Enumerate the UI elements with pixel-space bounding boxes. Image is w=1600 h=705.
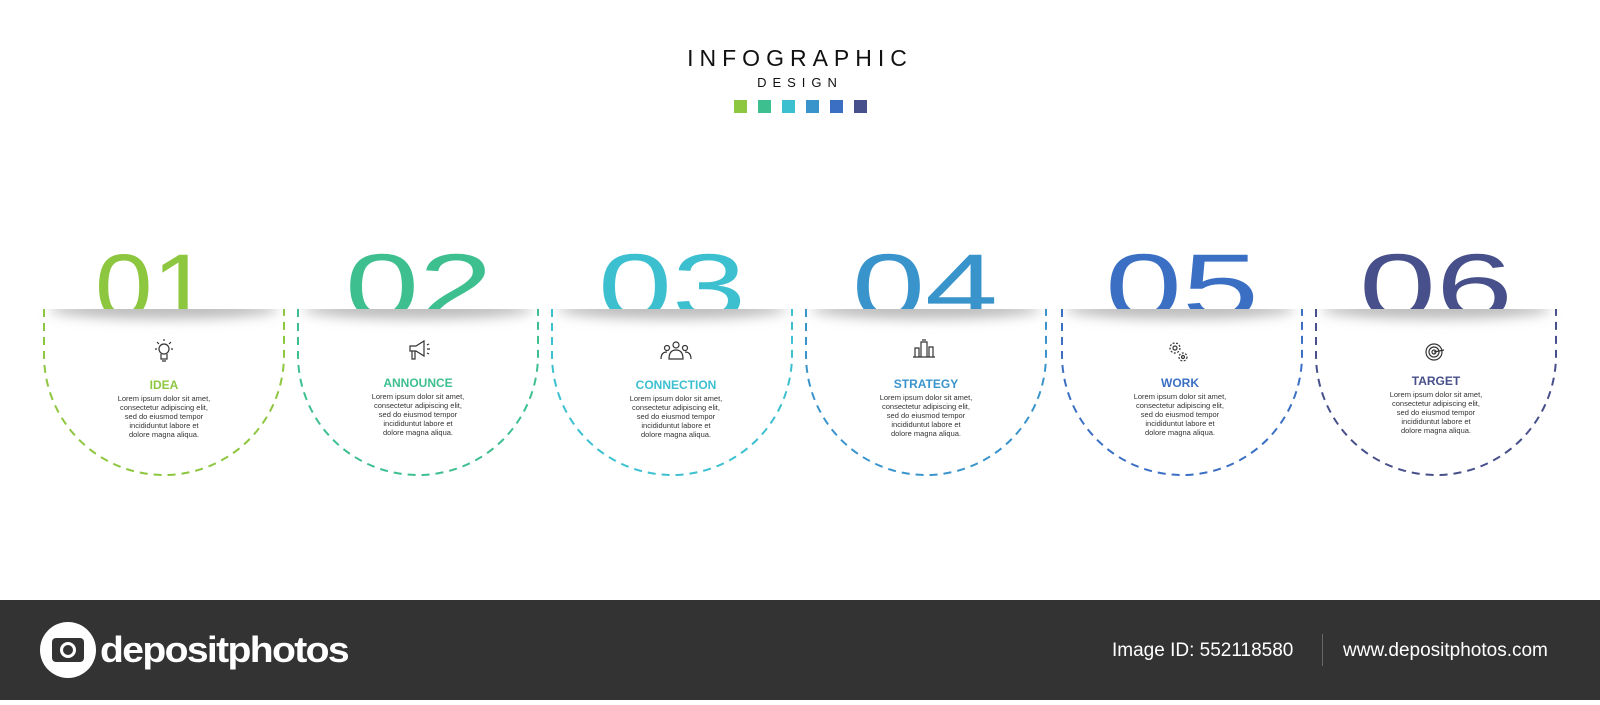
text block: dolore magna aliqua. (1401, 426, 1471, 435)
text block: dolore magna aliqua. (1145, 428, 1215, 437)
text block: consectetur adipiscing elit, (1136, 401, 1224, 410)
text block: Lorem ipsum dolor sit amet, (880, 393, 972, 402)
text block: dolore magna aliqua. (891, 429, 961, 438)
panel: 04 strategy (806, 236, 1046, 475)
text block: consectetur adipiscing elit, (882, 402, 970, 411)
panel: 03 connection (552, 236, 792, 475)
text block: incididuntut labore et (129, 421, 200, 430)
panel: 01 idea (44, 236, 284, 475)
text block: sed do eiusmod tempor (379, 410, 458, 419)
color legend squares (734, 100, 867, 113)
panel: 02 announce: ANNOUNCE (383, 376, 453, 390)
icon: gears (1170, 343, 1187, 361)
text block: dolore magna aliqua. (129, 430, 199, 439)
panel: 02 announce (298, 236, 538, 475)
text block: consectetur adipiscing elit, (120, 403, 208, 412)
number 02: 02 (345, 236, 493, 338)
text block: incididuntut labore et (1145, 419, 1216, 428)
number 06: 06 (1359, 236, 1513, 338)
icon: megaphone (410, 341, 430, 359)
text block: incididuntut labore et (383, 419, 454, 428)
text block: Lorem ipsum dolor sit amet, (118, 394, 210, 403)
text block: sed do eiusmod tempor (125, 412, 204, 421)
text block: incididuntut labore et (891, 420, 962, 429)
title: DESIGN (757, 75, 843, 90)
logo icon (40, 622, 96, 678)
text block: Lorem ipsum dolor sit amet, (1390, 390, 1482, 399)
icon: chess pieces (913, 340, 935, 357)
title: INFOGRAPHIC (687, 45, 913, 71)
text block: sed do eiusmod tempor (1397, 408, 1476, 417)
image id: Image ID: 552118580 (1112, 640, 1293, 661)
text block: sed do eiusmod tempor (637, 412, 716, 421)
text block: Lorem ipsum dolor sit amet, (372, 392, 464, 401)
text block: dolore magna aliqua. (641, 430, 711, 439)
text block: sed do eiusmod tempor (887, 411, 966, 420)
icon: target (1426, 344, 1444, 360)
panel: 06 target (1316, 236, 1556, 475)
icon: lightbulb (155, 339, 173, 361)
number 05: 05 (1105, 236, 1259, 338)
panel: 05 work (1062, 236, 1302, 475)
text block: consectetur adipiscing elit, (1392, 399, 1480, 408)
text block: dolore magna aliqua. (383, 428, 453, 437)
number 04: 04 (852, 236, 998, 338)
footer bar (0, 600, 1600, 700)
number 01: 01 (95, 236, 210, 338)
text block: sed do eiusmod tempor (1141, 410, 1220, 419)
icon: people (661, 342, 691, 359)
number 03: 03 (598, 236, 746, 338)
text block: Lorem ipsum dolor sit amet, (630, 394, 722, 403)
text block: consectetur adipiscing elit, (632, 403, 720, 412)
text block: incididuntut labore et (1401, 417, 1472, 426)
url: www.depositphotos.com (1342, 640, 1548, 661)
text block: consectetur adipiscing elit, (374, 401, 462, 410)
text block: incididuntut labore et (641, 421, 712, 430)
panel: 06 target: TARGET (1412, 374, 1461, 388)
panel: 04 strategy: STRATEGY (894, 377, 958, 391)
panel: 01 idea: IDEA (150, 378, 179, 392)
text block: Lorem ipsum dolor sit amet, (1134, 392, 1226, 401)
panel: 03 connection: CONNECTION (636, 378, 716, 392)
logo text: depositphotos (100, 629, 349, 670)
title (687, 45, 913, 90)
panel: 05 work: WORK (1161, 376, 1199, 390)
